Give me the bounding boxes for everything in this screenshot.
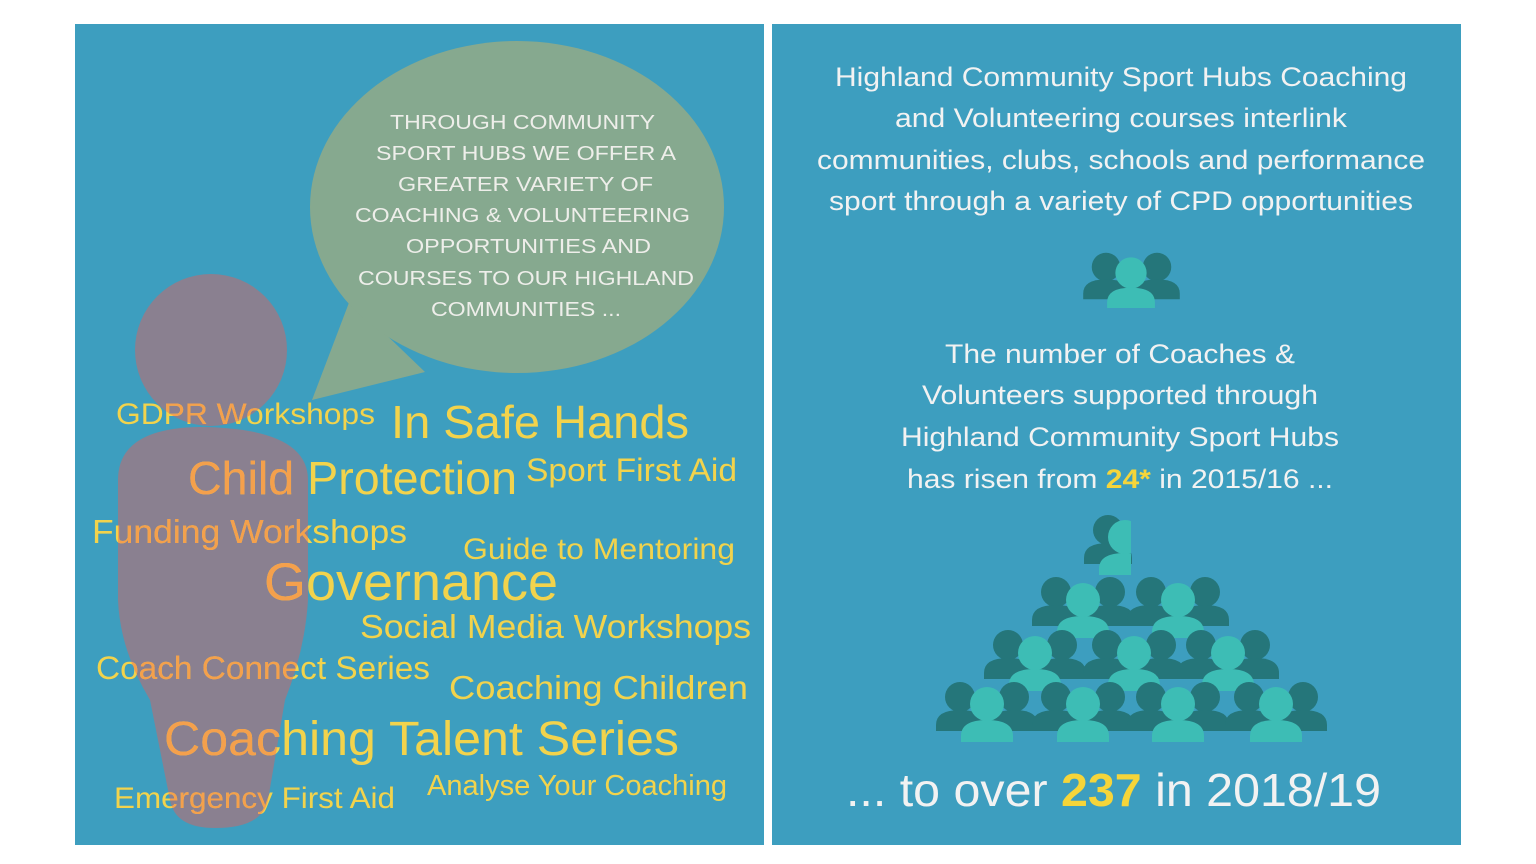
intro text: Highland Community Sport Hubs Coaching — [835, 62, 1407, 92]
stat text 2015/16 — [901, 339, 1339, 494]
stat text 2015/16: Volunteers supported through — [922, 380, 1318, 410]
word cloud: Coaching Children — [449, 669, 748, 706]
word cloud: Funding Workshops — [92, 513, 407, 550]
word cloud: In Safe Hands — [391, 396, 689, 448]
word cloud: Governance — [264, 553, 558, 612]
icon: people pyramid — [936, 515, 1327, 742]
stat text 2015/16: The number of Coaches & — [945, 339, 1295, 369]
intro text — [817, 62, 1425, 216]
bubble text: COURSES TO OUR HIGHLAND — [358, 268, 694, 290]
panel: left word cloud — [75, 24, 764, 845]
bubble text — [355, 112, 694, 321]
bubble text: OPPORTUNITIES AND — [406, 236, 651, 258]
word cloud: Guide to Mentoring — [463, 533, 735, 566]
word cloud: Sport First Aid — [526, 452, 737, 488]
stat text 2018/19: ... to over 237 in 2018/19 — [846, 764, 1381, 816]
speech bubble — [310, 41, 724, 400]
word cloud: Social Media Workshops — [360, 608, 751, 645]
icon: group of people — [1083, 253, 1180, 308]
intro text: and Volunteering courses interlink — [895, 103, 1348, 133]
word cloud: Emergency First Aid — [114, 782, 395, 815]
panel: right stats — [772, 24, 1461, 845]
word cloud: GDPR Workshops — [116, 398, 375, 431]
word cloud: Coaching Talent Series — [164, 713, 679, 766]
bubble text: SPORT HUBS WE OFFER A — [376, 143, 677, 165]
word cloud overlay on figure — [118, 404, 308, 814]
intro text: communities, clubs, schools and performance — [817, 145, 1425, 175]
word cloud — [92, 396, 751, 815]
stat text 2015/16: Highland Community Sport Hubs — [901, 422, 1339, 452]
word cloud: Analyse Your Coaching — [427, 770, 727, 802]
word cloud: Coach Connect Series — [96, 650, 430, 686]
bubble text: THROUGH COMMUNITY — [390, 112, 655, 134]
intro text: sport through a variety of CPD opportunities — [829, 186, 1413, 216]
bubble text: COMMUNITIES ... — [431, 299, 621, 321]
stat text 2015/16: has risen from 24* in 2015/16 ... — [907, 464, 1333, 494]
figure: person silhouette — [118, 274, 308, 828]
bubble text: GREATER VARIETY OF — [398, 174, 653, 196]
word cloud: Child Protection — [188, 452, 517, 504]
bubble text: COACHING & VOLUNTEERING — [355, 205, 690, 227]
